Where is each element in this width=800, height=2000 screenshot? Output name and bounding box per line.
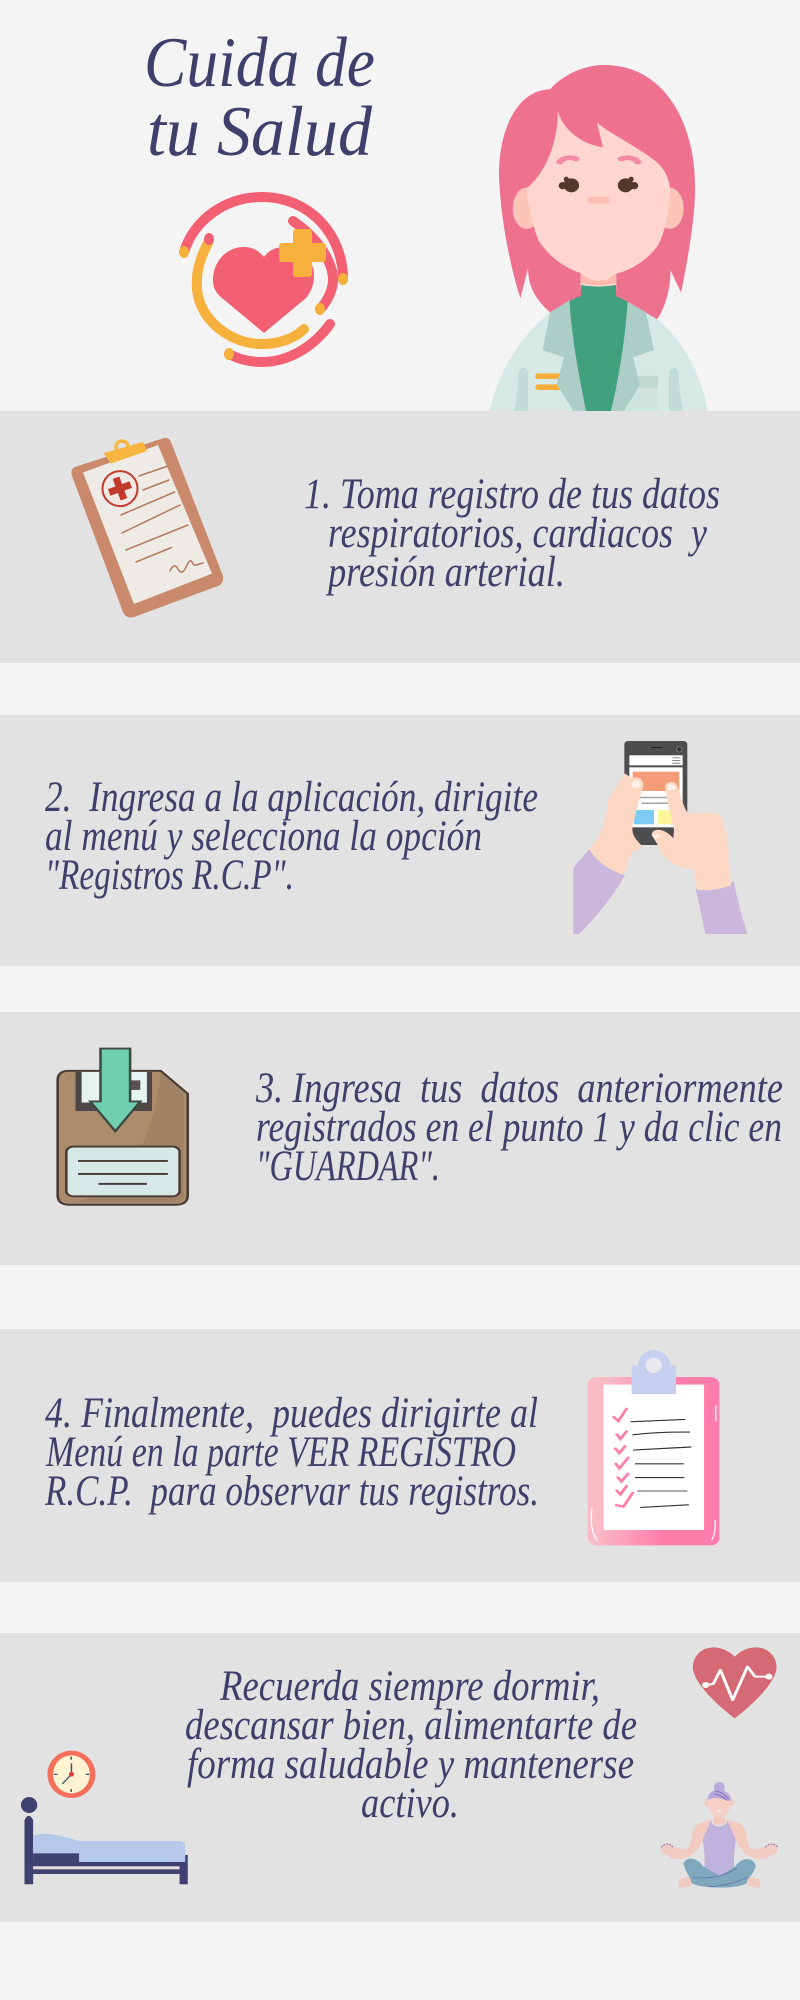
title: Cuida de xyxy=(144,24,375,102)
panel background xyxy=(0,1329,800,1582)
panel: step 4 xyxy=(0,1329,800,1582)
icon: wall clock xyxy=(47,1751,95,1798)
icon: floppy disk with download arrow xyxy=(58,1049,188,1205)
panel: step 2 xyxy=(0,715,800,966)
step 1 text xyxy=(304,471,720,596)
panel background xyxy=(0,715,800,966)
panel background xyxy=(0,411,800,663)
step 1 text: presión arterial. xyxy=(325,549,565,596)
reminder text: Recuerda siempre dormir, xyxy=(219,1663,600,1710)
icon: bed xyxy=(21,1797,188,1884)
step 3 text xyxy=(255,1065,783,1190)
icon: heart with medical cross and orbit arcs xyxy=(179,197,348,362)
reminder text: forma saludable y mantenerse xyxy=(187,1741,634,1788)
step 1 text: respiratorios, cardiacos y xyxy=(328,510,708,557)
panel background xyxy=(0,1633,800,1922)
illustration: doctor with pink hair xyxy=(489,65,708,411)
step 2 text: "Registros R.C.P". xyxy=(45,852,294,899)
panel background xyxy=(0,1012,800,1265)
reminder text: descansar bien, alimentarte de xyxy=(185,1702,637,1749)
step 2 text xyxy=(45,774,538,899)
icon: hands holding a phone xyxy=(573,741,747,934)
step 1 text: 1. Toma registro de tus datos xyxy=(304,471,720,518)
title: tu Salud xyxy=(147,93,372,171)
icon: medical clipboard xyxy=(71,438,223,617)
step 4 text: Menú en la parte VER REGISTRO xyxy=(45,1429,516,1476)
icon: pink checklist clipboard xyxy=(588,1350,719,1545)
reminder text xyxy=(185,1663,637,1827)
panel: step 3 xyxy=(0,1012,800,1265)
icon: heart with pulse line xyxy=(693,1647,777,1718)
step 2 text: 2. Ingresa a la aplicación, dirigite xyxy=(45,774,538,821)
reminder text: activo. xyxy=(361,1780,459,1827)
step 4 text xyxy=(44,1390,539,1515)
title xyxy=(144,24,375,171)
panel: closing reminder xyxy=(0,1633,800,1922)
step 2 text: al menú y selecciona la opción xyxy=(45,813,482,860)
panel: step 1 xyxy=(0,411,800,663)
step 3 text: "GUARDAR". xyxy=(256,1143,440,1190)
step 4 text: 4. Finalmente, puedes dirigirte al xyxy=(45,1390,538,1437)
step 4 text: R.C.P. para observar tus registros. xyxy=(44,1468,539,1515)
icon: woman meditating xyxy=(661,1782,778,1888)
